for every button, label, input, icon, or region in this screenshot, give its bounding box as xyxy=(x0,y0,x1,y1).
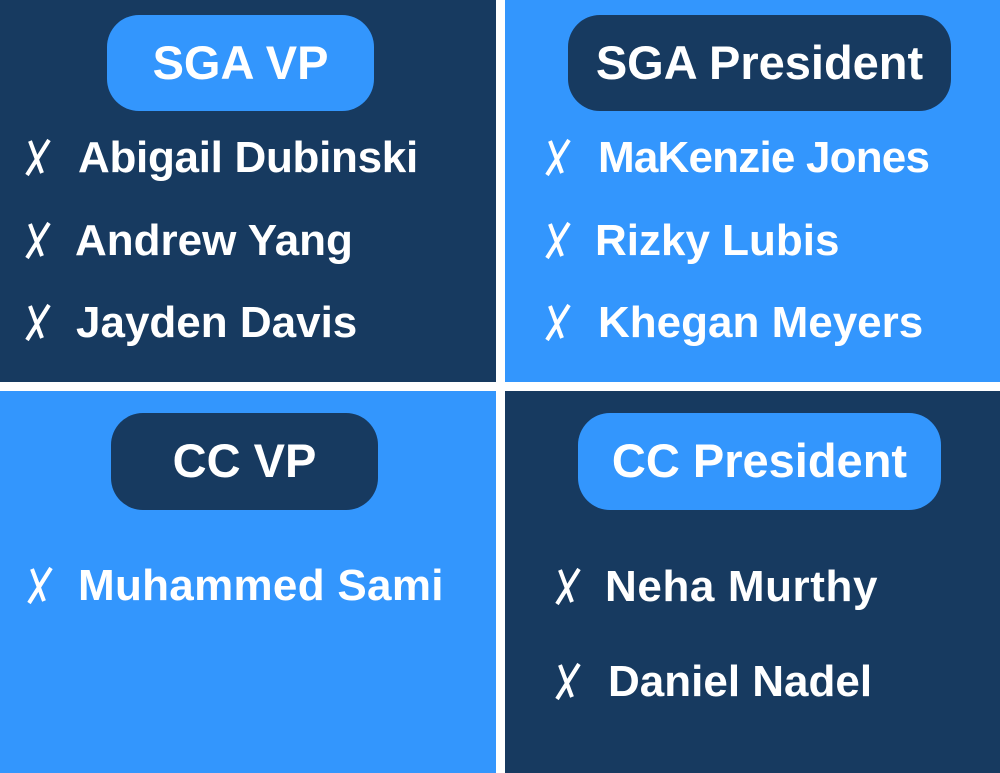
heading: CC VP xyxy=(111,413,378,510)
candidate: Abigail Dubinski: Abigail Dubinski xyxy=(78,133,418,182)
heading: CC VP: CC VP xyxy=(173,434,316,487)
candidate: Daniel Nadel: Daniel Nadel xyxy=(608,657,872,706)
candidate: MaKenzie Jones: MaKenzie Jones xyxy=(598,133,929,182)
heading: SGA President: SGA President xyxy=(596,36,923,89)
panel: SGA President xyxy=(505,0,1000,382)
candidate: Muhammed Sami: Muhammed Sami xyxy=(78,561,444,610)
panel: CC VP xyxy=(0,391,496,773)
candidate: Rizky Lubis: Rizky Lubis xyxy=(595,216,840,265)
heading: SGA President xyxy=(568,15,951,111)
panel: SGA VP xyxy=(0,0,496,382)
heading: SGA VP xyxy=(107,15,374,111)
heading: CC President xyxy=(578,413,941,510)
candidate: Andrew Yang: Andrew Yang xyxy=(75,216,353,265)
candidate: Neha Murthy: Neha Murthy xyxy=(605,562,878,611)
heading: CC President: CC President xyxy=(612,434,907,487)
panel: CC President xyxy=(505,391,1000,773)
candidate: Khegan Meyers: Khegan Meyers xyxy=(598,298,923,347)
candidate: Jayden Davis: Jayden Davis xyxy=(76,298,357,347)
heading: SGA VP: SGA VP xyxy=(153,36,328,89)
